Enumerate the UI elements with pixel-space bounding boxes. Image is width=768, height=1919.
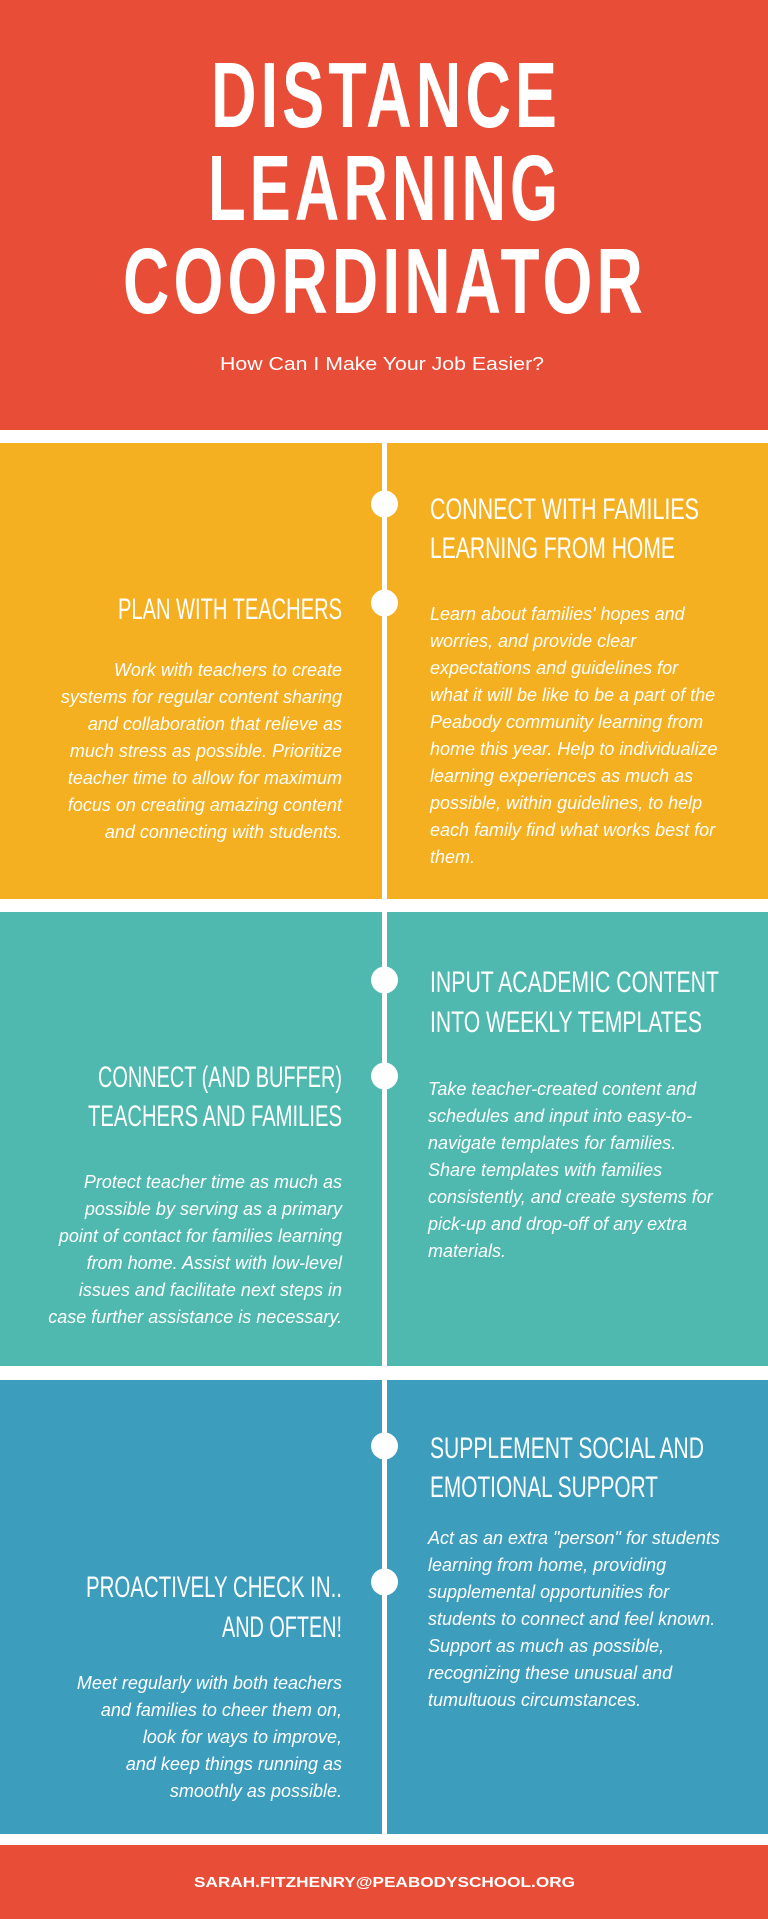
text: input academic content body: schedules and input into easy-to- bbox=[428, 1106, 692, 1126]
panel: teal section bbox=[0, 912, 768, 1366]
text: plan with teachers body bbox=[60, 660, 343, 842]
text: connect and buffer body: from home. Assist with low-level bbox=[87, 1253, 342, 1273]
text: connect and buffer body: Protect teacher time as much as bbox=[84, 1172, 342, 1192]
footer: SARAH.FITZHENRY@PEABODYSCHOOL.ORG bbox=[194, 1874, 575, 1891]
header banner bbox=[0, 0, 768, 430]
text: proactively check in body: Meet regularly with both teachers bbox=[77, 1673, 342, 1693]
panel: blue section bbox=[0, 1380, 768, 1834]
text: connect with families body: each family find what works best for bbox=[430, 820, 715, 840]
text: supplement social body: Support as much as possible, bbox=[428, 1636, 664, 1656]
text: plan with teachers body: systems for regular content sharing bbox=[61, 687, 342, 707]
headings: TEACHERS AND FAMILIES bbox=[88, 1100, 342, 1133]
headings bbox=[86, 493, 719, 1644]
text: connect with families body: worries, and provide clear bbox=[430, 631, 636, 651]
timeline line bbox=[382, 430, 387, 1845]
text: input academic content body: Take teacher-created content and bbox=[428, 1079, 696, 1099]
text: input academic content body: navigate templates for families. bbox=[428, 1133, 676, 1153]
text: input academic content body: Share templates with families bbox=[428, 1160, 662, 1180]
text: supplement social body: tumultuous circumstances. bbox=[428, 1690, 641, 1710]
text: supplement social body: students to connect and feel known. bbox=[428, 1609, 715, 1629]
text: input academic content body bbox=[428, 1079, 714, 1261]
text: connect and buffer body: case further assistance is necessary. bbox=[48, 1307, 342, 1327]
headings: LEARNING FROM HOME bbox=[430, 532, 675, 565]
text: plan with teachers body: and connecting with students. bbox=[105, 822, 342, 842]
text: connect with families body bbox=[430, 604, 717, 867]
text: supplement social body: recognizing these unusual and bbox=[428, 1663, 672, 1683]
text: plan with teachers body: and collaboration that relieve as bbox=[88, 714, 342, 734]
footer bbox=[0, 1845, 768, 1919]
timeline dots bbox=[371, 490, 398, 1596]
text: connect with families body: home this year. Help to individualize bbox=[430, 739, 717, 759]
text: input academic content body: materials. bbox=[428, 1241, 506, 1261]
title: DISTANCE bbox=[211, 43, 561, 147]
text: plan with teachers body: teacher time to allow for maximum bbox=[68, 768, 342, 788]
text: supplement social body: learning from home, providing bbox=[428, 1555, 666, 1575]
text: connect with families body: expectations and guidelines for bbox=[430, 658, 678, 678]
headings: PROACTIVELY CHECK IN.. bbox=[86, 1571, 342, 1604]
text: supplement social body bbox=[427, 1528, 720, 1710]
text: input academic content body: consistently, and create systems for bbox=[428, 1187, 713, 1207]
text: connect with families body: possible, within guidelines, to help bbox=[430, 793, 702, 813]
text: connect with families body: Learn about families' hopes and bbox=[430, 604, 685, 624]
text: proactively check in body: smoothly as possible. bbox=[170, 1781, 342, 1801]
subtitle: How Can I Make Your Job Easier? bbox=[220, 354, 544, 374]
text: supplement social body: supplemental opportunities for bbox=[428, 1582, 669, 1602]
text: connect with families body: them. bbox=[430, 847, 475, 867]
headings: AND OFTEN! bbox=[222, 1611, 342, 1644]
text: connect and buffer body: issues and facilitate next steps in bbox=[79, 1280, 342, 1300]
text: proactively check in body: look for ways to improve, bbox=[143, 1727, 342, 1747]
text: proactively check in body: and families to cheer them on, bbox=[101, 1700, 342, 1720]
text: connect with families body: what it will be like to be a part of the bbox=[430, 685, 715, 705]
text: input academic content body: pick-up and drop-off of any extra bbox=[428, 1214, 687, 1234]
headings: CONNECT (AND BUFFER) bbox=[98, 1061, 342, 1094]
headings: EMOTIONAL SUPPORT bbox=[430, 1471, 658, 1504]
text: connect and buffer body bbox=[48, 1172, 343, 1327]
text: proactively check in body bbox=[77, 1673, 342, 1801]
text: connect and buffer body: possible by serving as a primary bbox=[85, 1199, 342, 1219]
panel: yellow section bbox=[0, 443, 768, 899]
text: plan with teachers body: Work with teachers to create bbox=[114, 660, 342, 680]
text: proactively check in body: and keep things running as bbox=[126, 1754, 342, 1774]
text: plan with teachers body: much stress as possible. Prioritize bbox=[70, 741, 342, 761]
text: plan with teachers body: focus on creating amazing content bbox=[68, 795, 342, 815]
title bbox=[123, 43, 647, 333]
text: supplement social body: Act as an extra "person" for students bbox=[428, 1528, 720, 1548]
headings: PLAN WITH TEACHERS bbox=[118, 593, 342, 626]
text: connect with families body: learning experiences as much as bbox=[430, 766, 693, 786]
text: connect and buffer body: point of contact for families learning bbox=[59, 1226, 342, 1246]
text: connect with families body: Peabody community learning from bbox=[430, 712, 703, 732]
title: LEARNING bbox=[208, 136, 562, 240]
